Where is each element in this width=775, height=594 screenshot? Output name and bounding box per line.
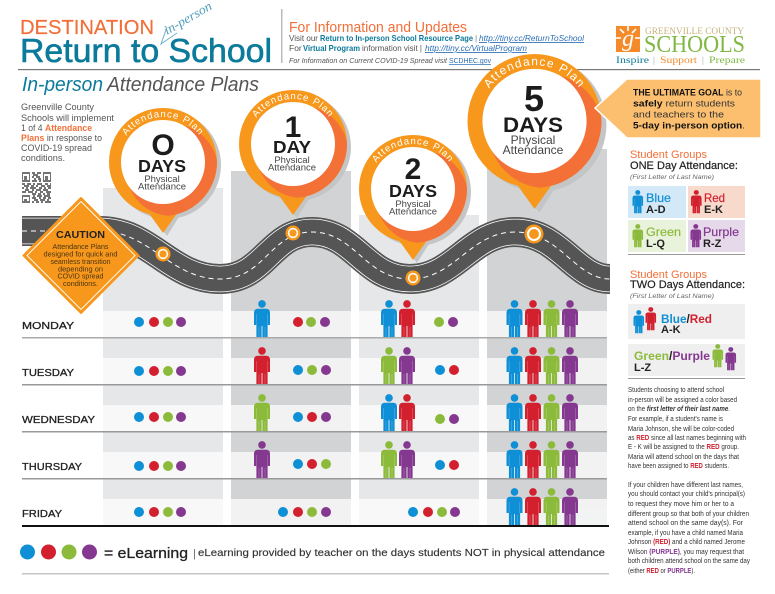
pin: 1 day: Physical	[274, 155, 310, 166]
text block: colour assignment explanation: as RED since all last names beginning with	[628, 433, 746, 442]
intro text block	[21, 102, 114, 163]
callout: ultimate goal: and teachers to the	[633, 110, 724, 120]
information and updates block: Virtual Program	[303, 43, 360, 53]
intro text block: Schools will implement	[21, 113, 114, 123]
row: Wednesday	[22, 394, 578, 431]
legend: eLearning: = eLearning	[104, 545, 188, 562]
pin: 0 days: Attendance	[138, 182, 186, 192]
logo: Greenville County Schools: |	[702, 56, 704, 66]
pin: 2 days: Attendance	[389, 206, 437, 218]
text block: children with different last names: you should contact your child's principal(s)	[628, 489, 745, 498]
information and updates block: |	[475, 33, 477, 43]
row: Thursday: THURSDAY	[22, 461, 82, 473]
text block: children with different last names: (either RED or PURPLE).	[628, 566, 695, 575]
pin: 5 days: Physical	[511, 133, 555, 147]
panel: two days student groups	[628, 269, 745, 379]
text block: colour assignment explanation: Maria will attend school on the days that	[628, 452, 740, 461]
winding road	[22, 231, 610, 279]
text block: colour assignment explanation: Students choosing to attend school	[628, 385, 724, 394]
legend: eLearning	[20, 544, 605, 562]
panel: two days student groups: Student Groups	[630, 269, 707, 281]
tile: purple	[688, 220, 745, 252]
text block: children with different last names: attend school on the same day(s). For	[628, 518, 743, 527]
text block: colour assignment explanation: on the first letter of their last name.	[628, 404, 730, 413]
callout: ultimate goal: 5-day in-person option .	[633, 120, 745, 132]
tile: blue and red: Blue/Red	[661, 312, 712, 326]
pin: 0 days: O	[151, 129, 175, 162]
caution sign: depending on	[58, 266, 103, 274]
panel: two days student groups: TWO Days Attendance:	[630, 279, 745, 291]
pin: 5 days: Attendance	[503, 143, 564, 157]
row: Friday	[22, 488, 578, 525]
tile: blue: A-D	[646, 204, 666, 216]
tile: green: L-Q	[646, 238, 665, 250]
information and updates block	[289, 19, 585, 65]
tile: blue and red: A-K	[661, 324, 681, 336]
pin: 5 days: Attendance Plan	[484, 58, 583, 88]
callout: ultimate goal: THE ULTIMATE GOAL is to	[633, 88, 742, 98]
information and updates block: SCDHEC.gov	[449, 56, 491, 65]
text block: children with different last names: example, if you have a child named Maria	[628, 528, 744, 537]
text block: children with different last names: to request they move him or her to a	[628, 499, 735, 508]
panel: one day student groups: Student Groups	[630, 149, 707, 161]
caution sign: CAUTION	[56, 229, 105, 241]
tile: blue	[628, 186, 686, 218]
panel: one day student groups: ONE Day Attendance:	[630, 160, 738, 172]
text block: children with different last names: If your children have different last names,	[628, 480, 743, 489]
pin: 5 days: 5	[524, 78, 544, 119]
text block: children with different last names: different group so that both of your children	[628, 509, 749, 518]
legend: eLearning: |	[193, 548, 196, 560]
logo: Greenville County Schools: g	[622, 26, 634, 52]
information and updates block: Return to In-person School Resource Page	[320, 33, 473, 43]
row: Thursday	[22, 441, 578, 478]
tile: green: Green	[646, 225, 681, 239]
callout: ultimate goal	[595, 79, 761, 138]
title: Destination Return to School: in-person	[161, 0, 214, 38]
text block: colour assignment explanation	[628, 385, 746, 470]
tile: blue: Blue	[646, 191, 671, 205]
caution sign: designed for quick and	[44, 252, 118, 258]
attendance plan columns	[22, 149, 609, 527]
panel: one day student groups	[628, 149, 745, 255]
pin: 5 days: DAYS	[503, 114, 563, 137]
title: Destination Return to School	[20, 0, 272, 69]
pin: 1 day: 1	[285, 111, 301, 144]
pin: 0 days	[109, 108, 221, 236]
pin: 5 days	[468, 54, 606, 212]
logo: Greenville County Schools: Support	[660, 56, 697, 66]
tile: purple: R-Z	[703, 238, 722, 250]
tile: green	[628, 220, 686, 252]
pin: 0 days: Attendance Plan	[123, 112, 202, 136]
row: Friday: FRIDAY	[22, 508, 62, 520]
logo: Greenville County Schools: Prepare	[709, 56, 745, 66]
intro text block: 1 of 4 Attendance	[21, 123, 92, 133]
intro text block: conditions.	[21, 153, 65, 163]
pin: 1 day	[239, 90, 351, 218]
information and updates block: http://tiny.cc/ReturnToSchool	[479, 33, 585, 43]
tile: purple: Purple	[703, 225, 739, 239]
pin: 0 days: DAYS	[138, 156, 186, 176]
tile: green and purple	[628, 344, 745, 376]
intro text block: Plans in response to	[21, 133, 102, 143]
title: Destination Return to School: DESTINATION	[20, 17, 154, 39]
panel: two days student groups: (First Letter of Last Name)	[630, 293, 714, 300]
pin: 2 days: DAYS	[389, 181, 437, 201]
information and updates block: For	[289, 43, 302, 53]
row: Monday	[22, 300, 578, 337]
pin: 2 days: Attendance Plan	[373, 138, 452, 163]
information and updates block: Visit our	[289, 33, 318, 43]
text block: colour assignment explanation: have been assigned to RED students.	[628, 461, 729, 470]
caution sign: Attendance Plans	[52, 244, 109, 251]
pin: 1 day: Attendance	[268, 162, 316, 174]
pin: 1 day: DAY	[273, 137, 311, 157]
row: Monday: MONDAY	[22, 320, 74, 332]
intro text block: Greenville County	[21, 102, 94, 112]
intro text block: COVID-19 spread	[21, 143, 92, 153]
legend: eLearning: eLearning provided by teacher on the days students NOT in physical attendance	[198, 547, 605, 559]
callout: ultimate goal: safely return students	[633, 98, 735, 110]
pin: 1 day: Attendance Plan	[253, 94, 332, 118]
information and updates block: For Information and Updates	[289, 19, 467, 36]
text block: children with different last names: both children attend school on the same day	[628, 556, 750, 565]
row: Tuesday: TUESDAY	[22, 367, 74, 379]
logo: Greenville County Schools: |	[653, 56, 655, 66]
road markers	[156, 224, 544, 286]
logo: Greenville County Schools: SCHOOLS	[644, 32, 745, 58]
row: Tuesday	[22, 347, 578, 384]
heading: In-person Attendance Plans	[22, 74, 259, 96]
tile: green and purple: L-Z	[634, 362, 651, 374]
text block: colour assignment explanation: For example, if a student's name is	[628, 414, 723, 423]
caution sign: conditions.	[63, 281, 98, 288]
pin: 2 days: 2	[405, 153, 421, 186]
text block: children with different last names: Wilson (PURPLE), you may request that	[628, 547, 745, 556]
text block: children with different last names	[628, 480, 750, 575]
heading: In-person Attendance Plans: In-person	[22, 74, 103, 96]
text block: children with different last names: Johnson (RED) and a child named Jerome	[628, 537, 745, 546]
caution sign: seamless transition	[50, 259, 111, 266]
pin: 0 days: Physical	[144, 174, 180, 185]
information and updates block: information visit |	[362, 43, 422, 53]
logo: Greenville County Schools	[616, 26, 745, 66]
row: Wednesday: WEDNESDAY	[22, 414, 95, 426]
pin: 2 days	[359, 135, 471, 263]
heading: In-person Attendance Plans: Attendance Plans	[106, 74, 259, 96]
tile: red: Red	[704, 191, 725, 205]
logo: Greenville County Schools: Inspire	[616, 56, 649, 66]
tile: red	[688, 186, 745, 218]
title: Destination Return to School: Return to School	[20, 32, 272, 69]
information and updates block: http://tiny.cc/VirtualProgram	[425, 43, 527, 53]
panel: one day student groups: (First Letter of Last Name)	[630, 174, 714, 181]
information and updates block: For Information on Current COVID-19 Spread visit	[289, 56, 448, 65]
text block: colour assignment explanation: in-person will be assigned a color based	[628, 395, 737, 404]
tile: blue and red	[628, 304, 745, 339]
text block: colour assignment explanation: Maria Johnson, she will be color-coded	[628, 424, 734, 433]
caution sign: COVID spread	[58, 274, 104, 280]
QR code	[22, 173, 51, 202]
logo: Greenville County Schools: GREENVILLE COUNTY	[645, 26, 745, 36]
tile: red: E-K	[704, 204, 723, 216]
text block: colour assignment explanation: E - K will be assigned to the RED group.	[628, 442, 739, 451]
tile: green and purple: Green/Purple	[634, 349, 710, 363]
pin: 2 days: Physical	[395, 199, 431, 210]
caution sign	[24, 198, 138, 313]
